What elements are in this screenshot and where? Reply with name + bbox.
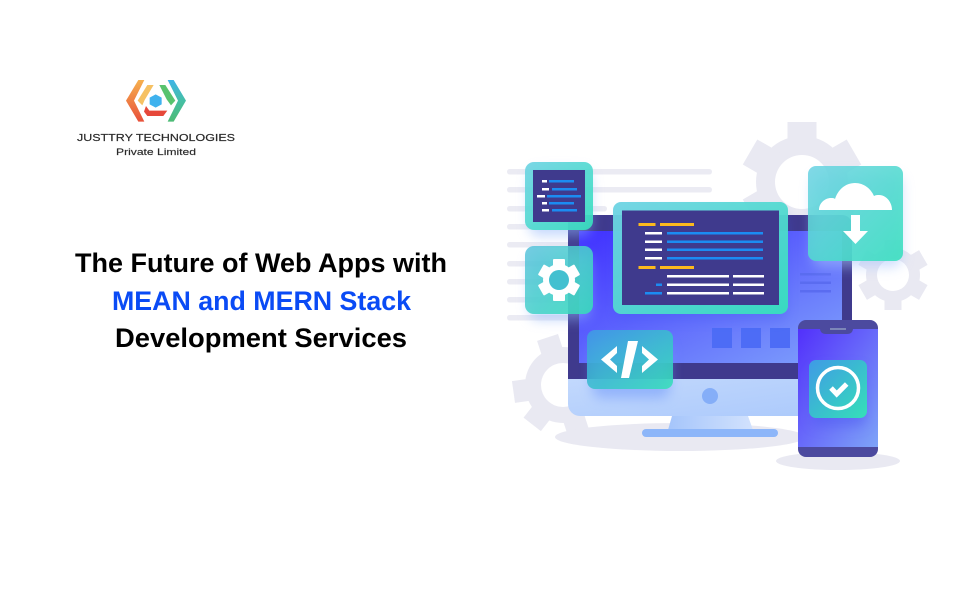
code tag card <box>587 330 673 398</box>
card shadow <box>812 175 902 267</box>
monitor foot <box>642 429 778 437</box>
monitor <box>568 215 852 437</box>
card shadow <box>529 170 591 236</box>
background gear right <box>858 240 928 310</box>
card code white <box>537 180 549 212</box>
card shadow <box>592 340 670 398</box>
check card shadow <box>812 368 866 426</box>
card body <box>525 162 593 230</box>
card window <box>533 170 585 222</box>
icon: cloud <box>819 183 892 210</box>
icon: code brackets <box>601 341 658 378</box>
power button <box>702 388 718 404</box>
editor frame <box>613 202 788 314</box>
phone body <box>798 320 878 457</box>
screen tiles <box>712 328 790 348</box>
card body <box>587 330 673 389</box>
background text lines <box>507 169 712 320</box>
monitor screen <box>579 231 842 363</box>
illustration <box>507 122 928 470</box>
editor window <box>622 210 779 305</box>
phone screen <box>798 329 878 447</box>
cloud download card <box>808 166 903 267</box>
monitor stand <box>668 416 753 430</box>
blue code lines <box>645 232 763 294</box>
icon: gear <box>538 259 580 301</box>
phone speaker <box>830 328 846 330</box>
title line 3: Development Services <box>115 323 407 353</box>
yellow code lines <box>638 223 694 269</box>
company name: JUSTTRY TECHNOLOGIES <box>77 132 235 144</box>
logo <box>77 80 235 158</box>
editor shadow <box>617 212 787 320</box>
screen lines <box>800 273 831 292</box>
icon: down arrow <box>843 215 868 244</box>
code snippet card <box>525 162 593 236</box>
title line 2 highlighted: MEAN and MERN Stack <box>112 286 412 316</box>
card code blue <box>547 180 581 212</box>
card body <box>525 246 593 314</box>
monitor frame <box>568 215 852 379</box>
phone <box>798 320 878 457</box>
background gear large <box>743 122 861 242</box>
title <box>75 248 447 353</box>
title line 1: The Future of Web Apps with <box>75 248 447 278</box>
white code lines <box>645 232 764 294</box>
monitor ground shadow <box>555 423 805 451</box>
phone ground shadow <box>776 452 900 470</box>
monitor chin <box>568 375 852 416</box>
background gear left <box>512 334 614 436</box>
check card <box>809 360 867 418</box>
icon: check circle <box>818 368 858 408</box>
phone notch <box>820 328 853 334</box>
gear card <box>525 246 593 320</box>
company suffix: Private Limited <box>116 147 196 158</box>
card body <box>808 166 903 261</box>
logo mark <box>126 80 186 122</box>
code editor panel <box>613 202 788 320</box>
card shadow <box>529 254 591 320</box>
